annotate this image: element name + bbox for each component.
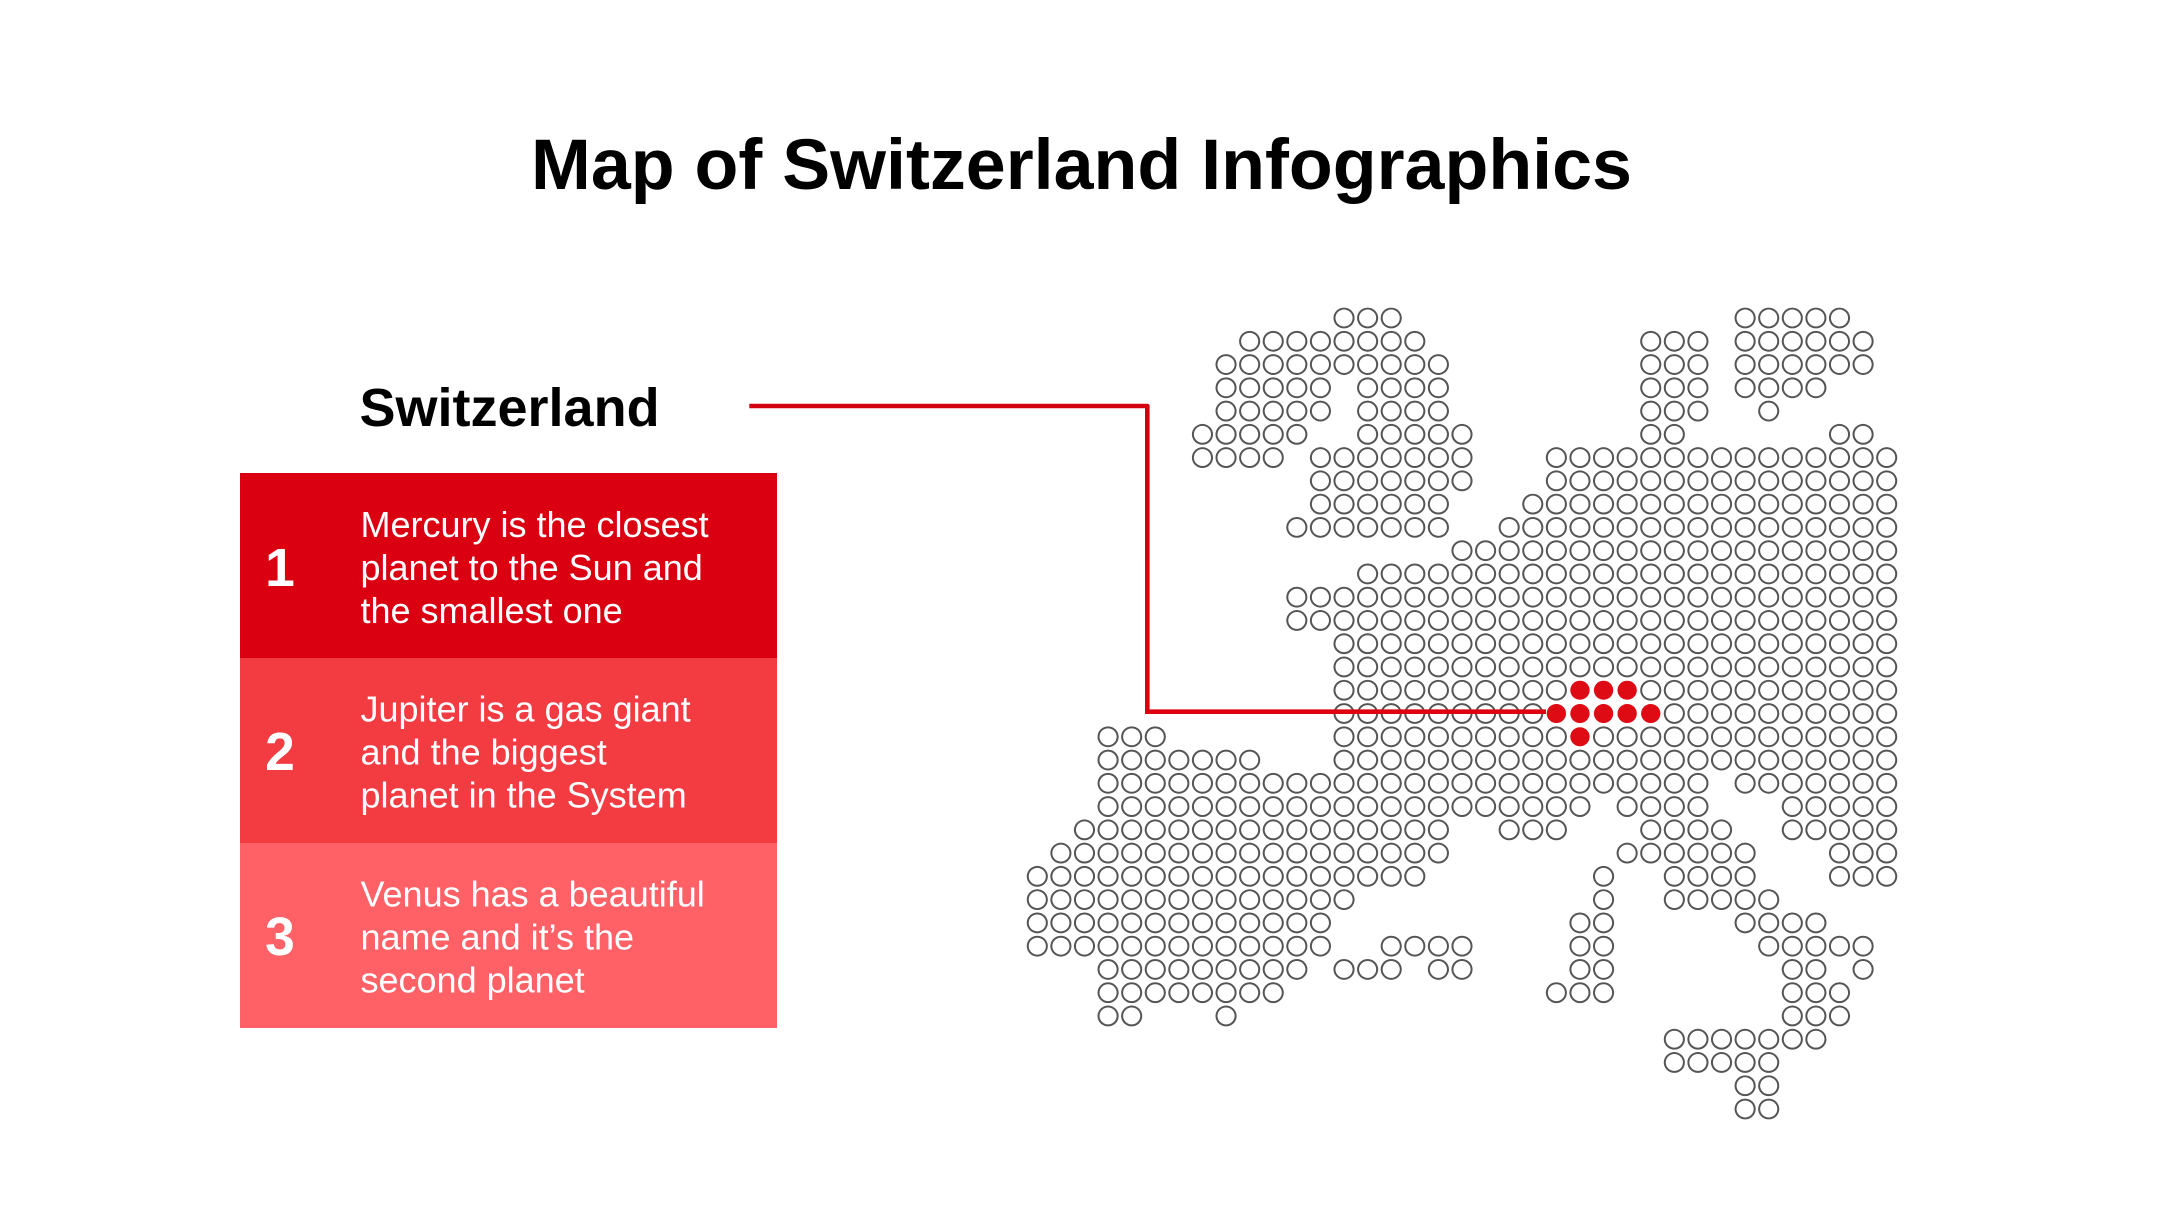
text block 3: Venus has a beautiful bbox=[360, 874, 705, 914]
text block 1: planet to the Sun and bbox=[360, 547, 703, 588]
text block 2: and the biggest bbox=[360, 732, 607, 772]
text block 2: planet in the System bbox=[360, 774, 687, 816]
connector line from label to Switzerland bbox=[749, 406, 1546, 712]
text block 1: Mercury is the closest bbox=[360, 504, 709, 545]
heading: Switzerland: Switzerland bbox=[360, 378, 660, 438]
text block 2: Jupiter is a gas giant bbox=[360, 688, 691, 730]
title: Map of Switzerland Infographics bbox=[531, 125, 1632, 205]
number 3: 3 bbox=[265, 908, 295, 967]
text block 3: name and it’s the bbox=[360, 916, 634, 958]
number 1: 1 bbox=[265, 539, 295, 598]
dot map of Europe bbox=[1037, 318, 1887, 1109]
panel: item 1 bbox=[240, 473, 777, 658]
highlighted dots: Switzerland bbox=[1556, 690, 1651, 737]
number 2: 2 bbox=[265, 723, 295, 782]
panel: item 2 bbox=[240, 658, 777, 843]
panel: item 3 bbox=[240, 843, 777, 1028]
text block 3: second planet bbox=[360, 960, 585, 1000]
text block 1: the smallest one bbox=[360, 590, 623, 631]
